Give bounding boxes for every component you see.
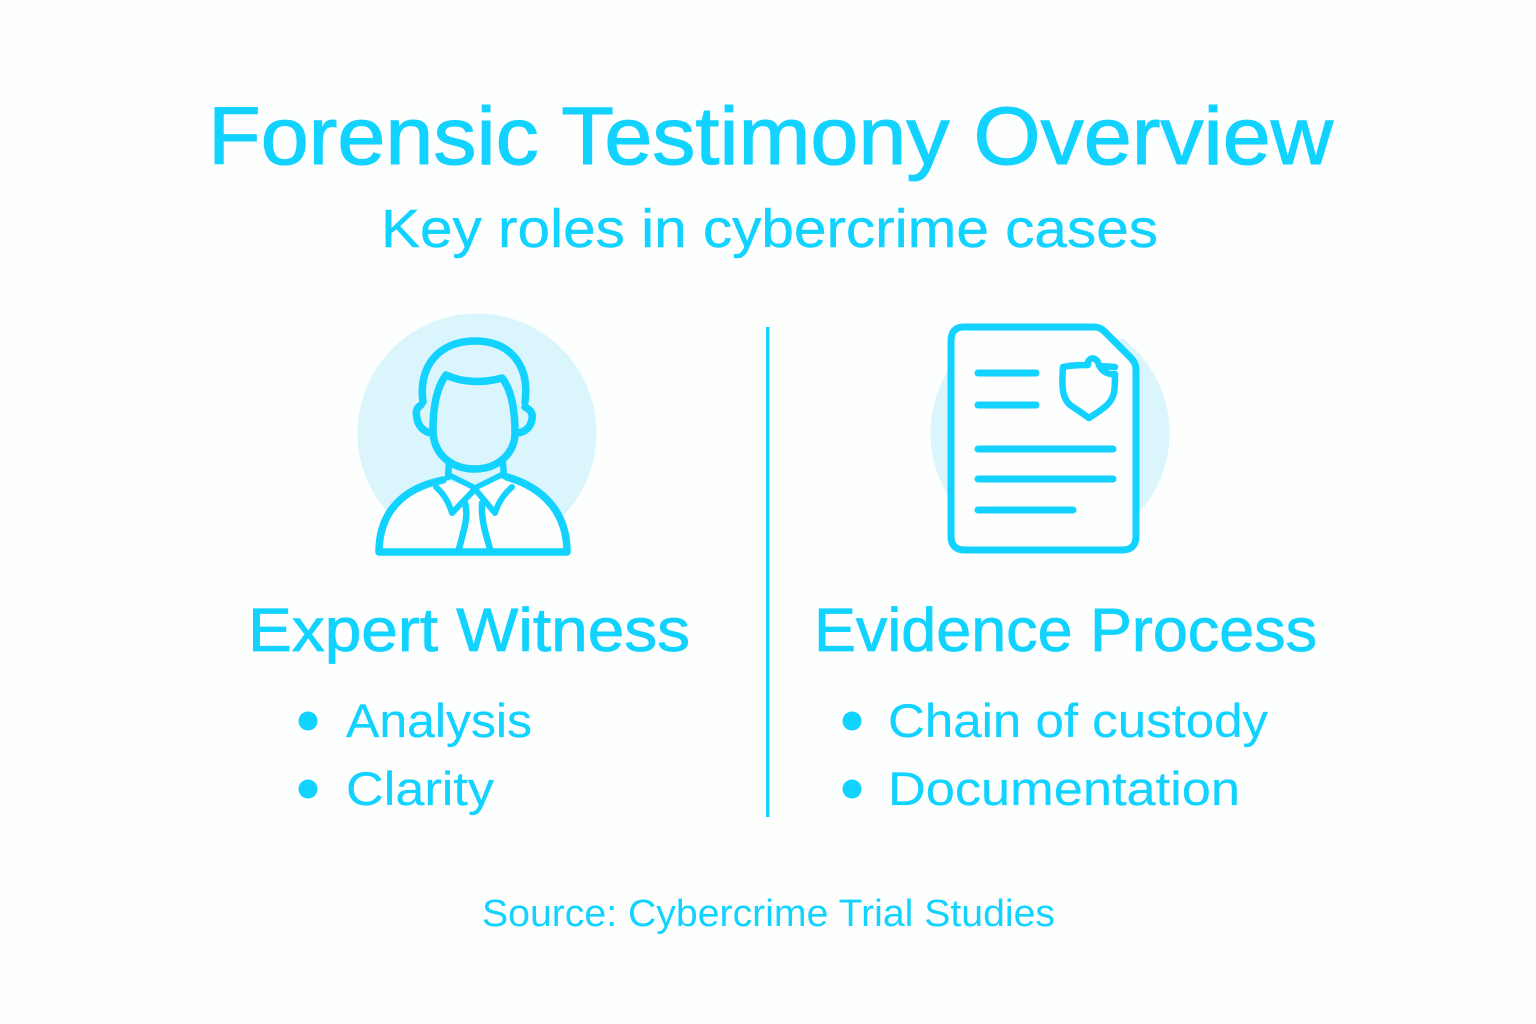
- subtitle: Key roles in cybercrime cases: [381, 199, 1158, 259]
- center divider: [766, 327, 770, 817]
- source note: Source: Cybercrime Trial Studies: [482, 893, 1055, 935]
- icon: evidence document with shield: [930, 314, 1170, 552]
- bullet: clarity: [298, 762, 495, 815]
- neck: [448, 463, 504, 477]
- panel: expert witness: [248, 596, 690, 815]
- shield: [1062, 358, 1115, 418]
- face: [433, 375, 515, 469]
- document outline: [951, 327, 1136, 550]
- icon: expert witness person: [358, 314, 596, 552]
- bullet: analysis: Analysis: [346, 694, 532, 747]
- left ear: [416, 405, 431, 433]
- bullet: documentation: Documentation: [888, 762, 1240, 815]
- neckline: [449, 475, 501, 488]
- shoulders outline: [379, 477, 567, 552]
- hair: [422, 341, 526, 402]
- title: Forensic Testimony Overview: [208, 91, 1334, 182]
- panel: evidence process: [814, 596, 1317, 815]
- bullet: chain of custody: Chain of custody: [888, 694, 1269, 747]
- icon background circle: document: [930, 339, 1170, 512]
- heading: expert witness: Expert Witness: [248, 596, 690, 664]
- necktie: [459, 503, 490, 549]
- heading: evidence process: Evidence Process: [814, 596, 1317, 664]
- collar: [436, 487, 512, 513]
- shirt body: [379, 477, 567, 552]
- bullet: clarity: Clarity: [346, 762, 495, 815]
- icon background circle: person: [358, 314, 596, 552]
- document lines: [978, 373, 1113, 510]
- infographic canvas: [214, 104, 1334, 934]
- right ear: [518, 407, 532, 433]
